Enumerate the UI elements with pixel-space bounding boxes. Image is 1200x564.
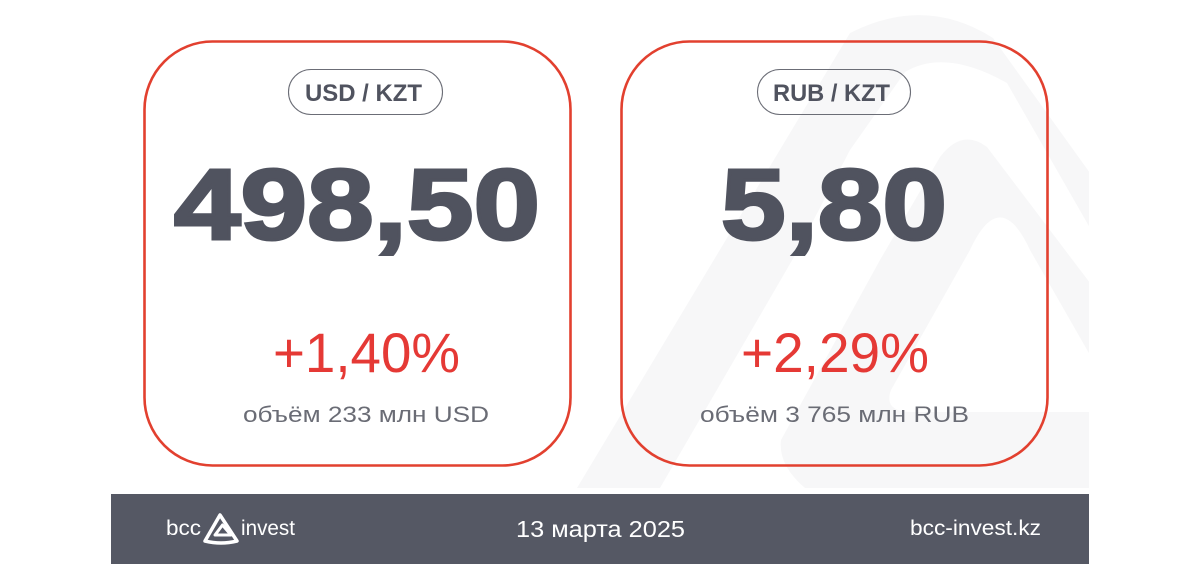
exchange rate: 5,80 (721, 149, 947, 261)
currency pair pill: USD / KZT (305, 80, 422, 107)
currency pair pill: RUB / KZT (773, 80, 890, 107)
brand logo: invest (241, 517, 295, 540)
panel border (622, 42, 1048, 466)
percent change: +2,29% (741, 321, 929, 384)
panel border (144, 42, 570, 466)
panel: RUB / KZT (622, 42, 1048, 466)
currency pair pill (758, 70, 910, 114)
icon: rounded triangle (205, 515, 237, 543)
brand logo (166, 515, 295, 543)
brand logo: bcc (166, 517, 201, 540)
exchange rate: 498,50 (174, 149, 540, 261)
percent change: +1,40% (273, 321, 460, 384)
background watermark logo (577, 15, 1090, 488)
trade volume: объём 233 млн USD (243, 402, 489, 427)
trade volume: объём 3 765 млн RUB (700, 402, 969, 427)
date: 13 марта 2025 (516, 516, 685, 542)
footer bar (111, 494, 1089, 564)
panel: USD / KZT (144, 42, 570, 466)
website: bcc-invest.kz (910, 517, 1041, 540)
currency pair pill (288, 70, 442, 114)
